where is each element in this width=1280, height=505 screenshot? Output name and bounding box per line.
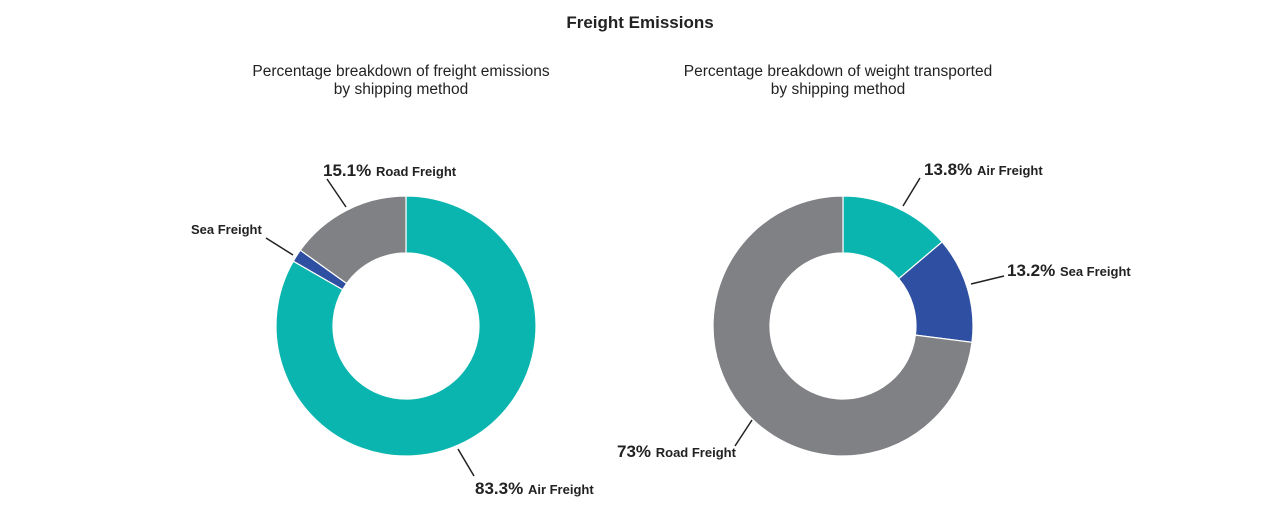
- label: air 13.8% right: 13.8% Air Freight: [924, 160, 1043, 179]
- title: Freight Emissions: [566, 13, 714, 32]
- subtitle: left chart: [252, 63, 550, 98]
- slice: air 83.3%: [276, 196, 536, 456]
- slice: sea 13.2%: [899, 242, 973, 342]
- label: road 15.1% left: 15.1% Road Freight: [323, 161, 457, 180]
- slice: road 15.1%: [300, 196, 406, 284]
- subtitle: left chart: by shipping method: [334, 81, 468, 98]
- label: sea 13.2% right: [971, 261, 1131, 284]
- subtitle: left chart: Percentage breakdown of freight emissions: [252, 63, 550, 80]
- label: sea freight left: [191, 222, 293, 255]
- label: road 15.1% left: [323, 161, 457, 207]
- donut chart: weight transported: [713, 196, 973, 456]
- subtitle: right chart: [684, 63, 992, 98]
- label: air 13.8% right: [903, 160, 1043, 206]
- subtitle: right chart: Percentage breakdown of weight transported: [684, 63, 992, 80]
- subtitle: right chart: by shipping method: [771, 81, 905, 98]
- label: air 83.3% left: [458, 449, 594, 498]
- slice: road 73%: [713, 196, 972, 456]
- donut chart: freight emissions: [276, 196, 536, 456]
- label: air 83.3% left: 83.3% Air Freight: [475, 479, 594, 498]
- label: road 73% right: 73% Road Freight: [617, 442, 737, 461]
- slice: sea 1.6%: [293, 250, 347, 290]
- label: sea freight left: Sea Freight: [191, 222, 262, 237]
- label: road 73% right: [617, 420, 752, 461]
- label: sea 13.2% right: 13.2% Sea Freight: [1007, 261, 1131, 280]
- slice: air 13.8%: [843, 196, 942, 279]
